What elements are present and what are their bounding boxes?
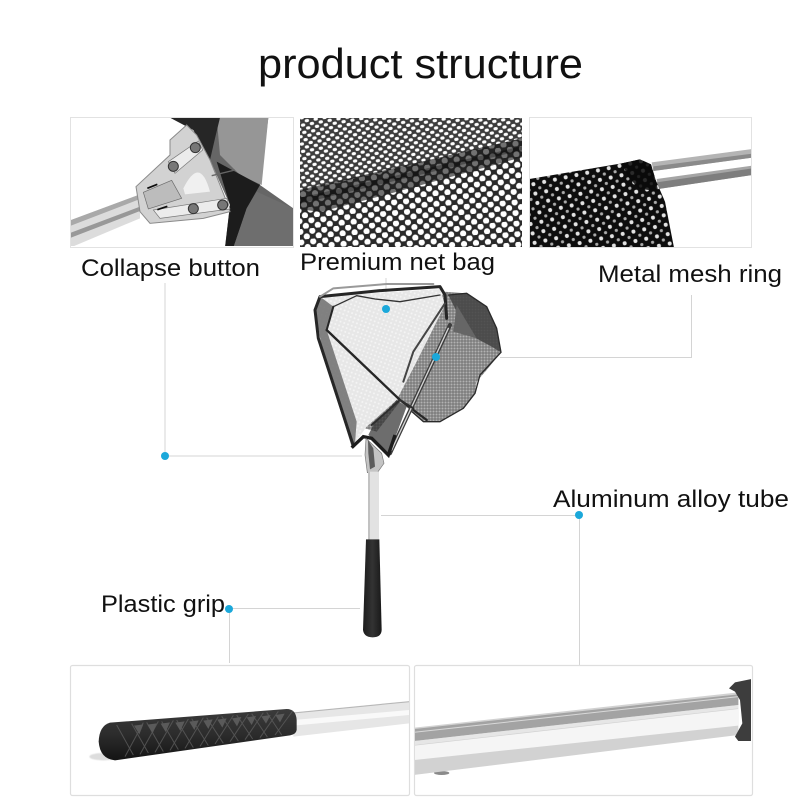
leader: plastic grip [230, 608, 360, 663]
leader: collapse button [165, 283, 362, 456]
dot: metal mesh ring [432, 353, 440, 361]
leader: aluminum alloy tube [381, 516, 580, 665]
net fabric behind the hinge [170, 118, 293, 248]
label: metal mesh ring: Metal mesh ring [598, 261, 782, 288]
tube [368, 472, 379, 540]
hinge [365, 438, 384, 473]
hinge bracket [136, 125, 235, 223]
product: landing net head [315, 284, 501, 455]
leader: premium net bag [385, 278, 387, 308]
dot: premium net bag [382, 305, 390, 313]
title: product structure [258, 40, 583, 87]
black net corner [529, 159, 674, 248]
label: collapse button: Collapse button [81, 255, 260, 282]
rubber grip [99, 709, 297, 760]
label: aluminum alloy tube: Aluminum alloy tube [553, 486, 789, 513]
panel: collapse button photo [70, 118, 294, 248]
grip shadow [89, 753, 117, 760]
panel: aluminum tube photo [414, 666, 752, 796]
dot: aluminum alloy tube [575, 511, 583, 519]
label: premium net bag: Premium net bag [300, 249, 495, 276]
tube foot [434, 771, 449, 775]
twin ring tube [652, 149, 752, 189]
front net bag [315, 289, 445, 445]
dot: plastic grip [225, 605, 233, 613]
tube body [414, 692, 738, 775]
tube [293, 701, 409, 737]
rear net bag [365, 292, 501, 432]
handle grip [363, 539, 382, 637]
panel: metal mesh ring photo [529, 118, 752, 248]
panel: net bag close-up photo [299, 117, 523, 248]
tube end cap [729, 679, 752, 741]
label: plastic grip: Plastic grip [101, 591, 225, 618]
panel: plastic grip photo [70, 666, 410, 796]
leader: metal mesh ring [500, 295, 692, 358]
aluminium tube [71, 194, 140, 247]
frame and seams [315, 284, 501, 453]
marker dots [161, 305, 583, 613]
product: hinge, tube and handle [363, 438, 384, 637]
dot: collapse button [161, 452, 169, 460]
